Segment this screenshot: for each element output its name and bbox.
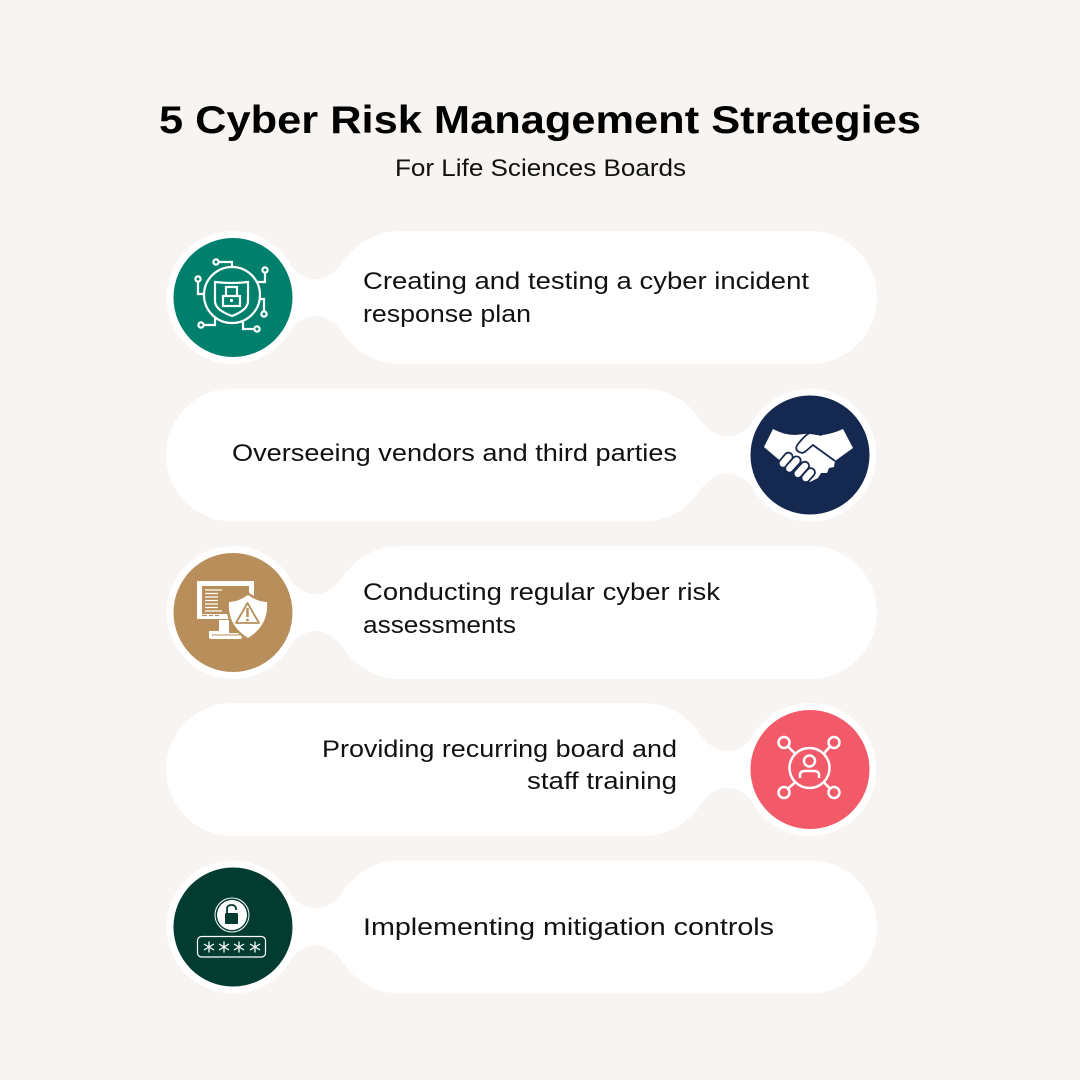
text: strategy 4: staff training — [527, 768, 677, 795]
white capsule shape 2 — [166, 388, 876, 522]
panel: strategy 1 — [166, 231, 877, 364]
title: 5 Cyber Risk Management Strategies — [159, 99, 921, 142]
text: strategy 1: response plan — [363, 301, 531, 328]
text: strategy 5: Implementing mitigation controls — [363, 914, 774, 941]
white capsule shape 4 — [166, 703, 876, 836]
text: strategy 2: Overseeing vendors and third parties — [232, 440, 677, 467]
text: strategy 4 — [322, 736, 677, 795]
text: strategy 4: Providing recurring board and — [322, 736, 677, 763]
panel: strategy 4 — [166, 703, 876, 836]
icon: padlock and password field — [174, 868, 292, 986]
text: strategy 1: Creating and testing a cyber incident — [363, 268, 809, 295]
panel: strategy 5 — [166, 860, 877, 994]
white capsule shape 3 — [166, 546, 877, 679]
icon: connected person network — [750, 710, 870, 829]
white capsule shape 5 — [166, 860, 877, 994]
panel: strategy 2 — [166, 388, 876, 522]
icon: circuit shield lock — [174, 238, 292, 357]
subtitle: For Life Sciences Boards — [395, 155, 686, 182]
panel: strategy 3 — [166, 546, 877, 679]
text: strategy 3: assessments — [363, 612, 516, 639]
text: strategy 3 — [363, 579, 721, 639]
icon: handshake — [750, 396, 870, 514]
icon: monitor with warning shield — [174, 553, 292, 672]
white capsule shape 1 — [166, 231, 877, 364]
text: strategy 1 — [363, 268, 809, 328]
text: strategy 3: Conducting regular cyber risk — [363, 579, 721, 606]
